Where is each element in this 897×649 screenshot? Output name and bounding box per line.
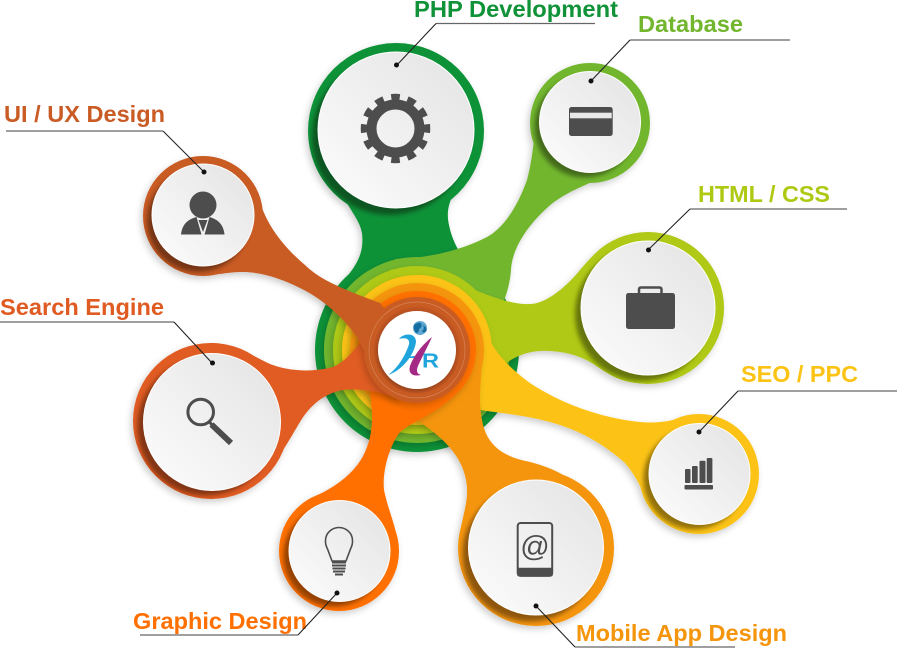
panel: Mobile App Design branch (350, 283, 614, 626)
icon: magnifier (188, 399, 231, 443)
label: Search Engine (0, 294, 215, 366)
label: Mobile App Design (534, 604, 787, 647)
panel: UI / UX Design branch (143, 156, 470, 403)
label: HTML / CSS (646, 181, 847, 252)
label: Graphic Design: Graphic Design (133, 608, 307, 634)
panel: SEO / PPC branch (342, 275, 759, 534)
label: SEO / PPC: SEO / PPC (741, 361, 858, 387)
icon: card (569, 107, 613, 136)
icon: phone: @ (520, 531, 550, 563)
logo: H swoosh (388, 334, 432, 376)
logo: R letter: R (422, 350, 440, 372)
label: Database: Database (638, 11, 743, 37)
label: HTML / CSS: HTML / CSS (698, 181, 830, 207)
logo: globe (413, 321, 427, 335)
panel: Graphic Design branch (279, 291, 476, 611)
panel: HTML / CSS branch (333, 232, 724, 434)
label: Database (588, 11, 790, 84)
central logo badge (369, 302, 465, 398)
panel: PHP Development branch (308, 43, 519, 452)
panel: Database branch (324, 63, 650, 443)
label: UI / UX Design (4, 101, 206, 174)
label: Search Engine: Search Engine (0, 294, 164, 320)
icon: phone (517, 523, 553, 577)
icon: gear (364, 97, 427, 160)
label: PHP Development (394, 0, 618, 68)
panel: Search Engine branch (133, 340, 417, 499)
label: Mobile App Design: Mobile App Design (576, 620, 787, 646)
icon: briefcase (626, 288, 675, 329)
label: SEO / PPC (696, 361, 897, 434)
icon: person (181, 192, 224, 234)
label: UI / UX Design: UI / UX Design (4, 101, 165, 127)
label: Graphic Design (133, 590, 340, 635)
icon: bar chart (684, 458, 713, 490)
icon: light bulb (325, 528, 353, 574)
